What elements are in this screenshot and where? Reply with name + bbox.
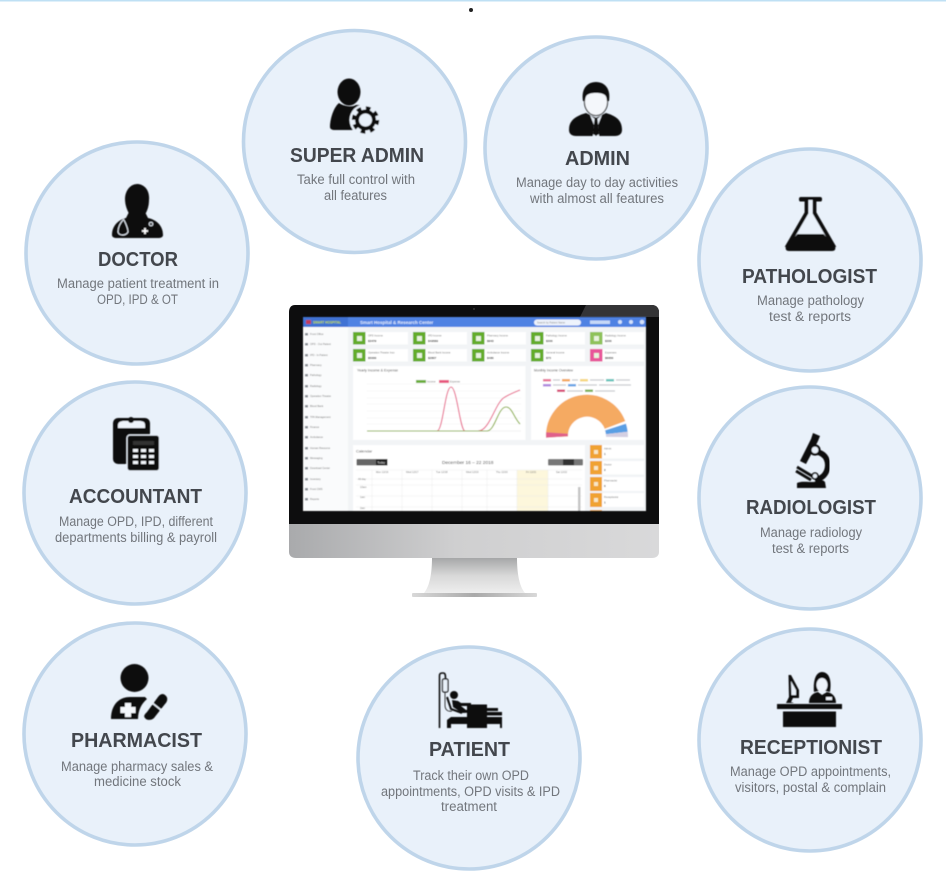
dashboard sidebar: OPD - Out Patient [310, 342, 331, 346]
heading: admin: ADMIN [565, 148, 630, 170]
dashboard top bar [303, 317, 646, 327]
dashboard stat cards: Expenses [605, 350, 617, 354]
dashboard sidebar: Blood Bank [310, 404, 324, 408]
dashboard stat cards: $5000 [368, 356, 377, 360]
dashboard sidebar [303, 327, 348, 511]
icon: flask [786, 197, 835, 251]
dashboard sidebar: Pharmacy [310, 363, 322, 367]
description: pharmacist: Manage pharmacy sales & [61, 759, 213, 774]
description: pathologist: test & reports [769, 309, 851, 324]
heading: pathologist: PATHOLOGIST [742, 266, 877, 288]
dashboard stat cards: $300 [546, 339, 553, 343]
description: patient: Track their own OPD [413, 768, 529, 783]
dashboard stat cards: Pharmacy Income [487, 334, 508, 338]
description: pathologist [757, 293, 864, 324]
description: receptionist [730, 764, 891, 795]
heading: radiologist: RADIOLOGIST [746, 497, 876, 519]
description: doctor [57, 276, 219, 307]
dashboard stat cards: $300 [605, 339, 612, 343]
description: patient [381, 768, 560, 814]
description: pathologist: Manage pathology [757, 293, 864, 308]
dashboard stat cards: $3479 [368, 339, 377, 343]
dashboard top bar: SMART HOSPITAL [313, 320, 341, 324]
line chart: yearly income and expense: Expense [450, 380, 461, 384]
description: receptionist: Manage OPD appointments, [730, 764, 891, 779]
icon: doctor with stethoscope [112, 184, 163, 238]
dashboard stat cards: $943 [487, 339, 494, 343]
dashboard stat cards: Blood Bank Income [428, 350, 451, 354]
description: super admin [297, 172, 415, 203]
dashboard top bar: Search by Patient Name [537, 320, 566, 324]
staff count cards: 2 [604, 468, 606, 472]
icon: man in suit [569, 82, 622, 136]
dashboard stat cards: $49589 [428, 339, 438, 343]
calendar panel: December 16 – 22 2018 [442, 460, 494, 466]
staff count cards: 0 [604, 484, 606, 488]
staff count cards: Doctor [604, 462, 612, 466]
description: pharmacist: medicine stock [94, 774, 181, 789]
calendar panel: 10am [360, 485, 366, 489]
description: accountant [55, 514, 217, 545]
calendar panel: 2am [360, 506, 365, 510]
description: doctor: OPD, IPD & OT [97, 292, 178, 307]
panel: super admin [244, 30, 466, 252]
description: super admin: Take full control with [297, 172, 415, 187]
dashboard sidebar: TPA Management [310, 415, 331, 419]
dashboard stat cards [353, 332, 644, 362]
dashboard sidebar: Finance [310, 425, 320, 429]
heading: doctor: DOCTOR [98, 249, 179, 271]
calendar panel: Today [378, 460, 386, 464]
description: radiologist: Manage radiology [760, 525, 862, 540]
calendar panel: All-day [358, 477, 367, 481]
donut chart: monthly income overview [531, 366, 644, 440]
calendar panel: Wed 12/17 [406, 470, 419, 474]
description: admin [516, 175, 678, 206]
icon: user with gear [330, 78, 382, 136]
monitor bezel [289, 305, 659, 524]
line chart: yearly income and expense: Yearly Income & Expense [357, 368, 398, 372]
description: doctor: Manage patient treatment in [57, 276, 219, 291]
dashboard stat cards: $6650 [605, 356, 614, 360]
line chart: yearly income and expense: Income [427, 380, 436, 384]
calendar panel: Sat 12/22 [556, 470, 568, 474]
staff count cards: 1 [604, 452, 606, 456]
dashboard stat cards: $2807 [428, 356, 437, 360]
heading: accountant: ACCOUNTANT [69, 486, 202, 508]
description: admin: with almost all features [529, 191, 664, 206]
panel: pathologist [699, 149, 921, 371]
dashboard sidebar: Front Office [310, 332, 324, 336]
description: receptionist: visitors, postal & complain [735, 780, 886, 795]
calendar panel: 1am [360, 495, 365, 499]
panel: pharmacist [24, 623, 246, 845]
description: radiologist: test & reports [772, 541, 849, 556]
calendar panel: Mon 12/16 [376, 470, 389, 474]
heading: patient: PATIENT [429, 739, 510, 761]
dashboard top bar: Smart Hospital & Research Center [360, 320, 434, 325]
heading: super admin: SUPER ADMIN [290, 145, 424, 167]
dashboard stat cards: $480 [487, 356, 494, 360]
line chart: yearly income and expense [353, 366, 526, 440]
icon: clipboard and calculator [113, 417, 160, 471]
panel: receptionist [699, 629, 921, 851]
icon: patient in bed with drip [440, 673, 502, 728]
dashboard sidebar: Operation Theatre [310, 394, 332, 398]
staff count cards: Pharmacist [604, 478, 617, 482]
panel: admin [485, 37, 707, 259]
description: super admin: all features [324, 188, 387, 203]
staff count cards: 1 [604, 500, 606, 504]
description: accountant: Manage OPD, IPD, different [59, 514, 213, 529]
panel: accountant [24, 382, 246, 604]
dashboard stat cards: Ambulance Income [487, 350, 510, 354]
dashboard stat cards: General Income [546, 350, 565, 354]
calendar panel: Thu 12/20 [496, 470, 508, 474]
panel: doctor [26, 142, 248, 364]
heading: pharmacist: PHARMACIST [71, 730, 202, 752]
dashboard screen [303, 317, 646, 511]
icon: microscope [796, 433, 828, 488]
dashboard stat cards: $75 [546, 356, 551, 360]
description: patient: treatment [441, 799, 497, 814]
dashboard sidebar: Radiology [310, 384, 322, 388]
dashboard sidebar: Download Center [310, 466, 330, 470]
dashboard stat cards: Radiology Income [605, 334, 626, 338]
heading: receptionist: RECEPTIONIST [740, 737, 882, 759]
icon: pharmacist with pill [111, 664, 167, 720]
icon: receptionist at desk [777, 672, 842, 727]
monitor stand [412, 558, 537, 597]
staff count cards [590, 445, 644, 511]
panel: radiologist [699, 387, 921, 609]
calendar panel: Fri 12/21 [526, 470, 537, 474]
calendar panel: Tue 12/18 [436, 470, 448, 474]
description: radiologist [760, 525, 862, 556]
dashboard sidebar: Inventory [310, 477, 321, 481]
dashboard sidebar: IPD - In Patient [310, 353, 328, 357]
monitor with dashboard [289, 305, 659, 597]
description: accountant: departments billing & payroll [55, 530, 217, 545]
staff count cards: Admin [604, 446, 612, 450]
monitor chin [289, 524, 659, 558]
dashboard sidebar: Ambulance [310, 435, 324, 439]
dashboard sidebar: Reports [310, 497, 320, 501]
dashboard sidebar: Pathology [310, 373, 322, 377]
calendar panel: Calendar [356, 448, 373, 454]
description: patient: appointments, OPD visits & IPD [381, 784, 560, 799]
calendar panel [353, 445, 585, 511]
dashboard sidebar: Messaging [310, 456, 323, 460]
dashboard stat cards: Operation Theatre Inco [368, 350, 395, 354]
staff count cards: Receptionist [604, 495, 619, 499]
description: admin: Manage day to day activities [516, 175, 678, 190]
dashboard sidebar: Front CMS [310, 487, 323, 491]
donut chart: monthly income overview: Monthly Income Overview [534, 368, 574, 372]
dashboard stat cards: Pathology Income [546, 334, 567, 338]
dashboard stat cards: IPD Income [428, 334, 442, 338]
calendar panel: Wed 12/19 [466, 470, 479, 474]
dashboard sidebar: Human Resource [310, 446, 331, 450]
dashboard stat cards: OPD Income [368, 334, 383, 338]
panel: patient [358, 647, 580, 869]
description: pharmacist [61, 759, 213, 789]
